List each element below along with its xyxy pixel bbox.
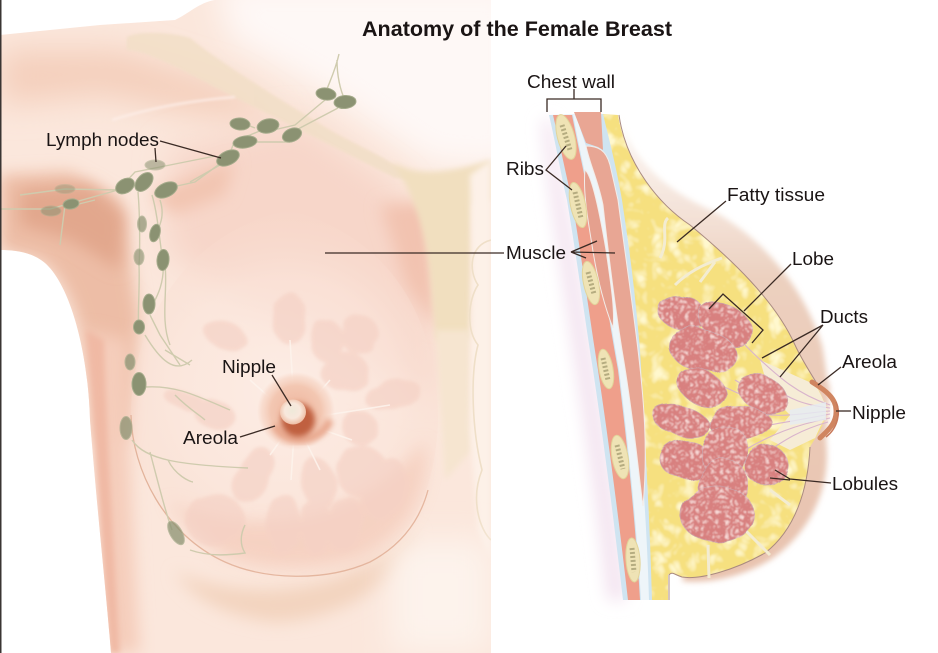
skin line [619,115,816,600]
label: ribs [506,146,572,190]
label: fatty tissue: Fatty tissue [727,184,825,205]
back shadow [542,120,626,600]
label: areola, section view [818,351,898,385]
label: nipple, front view: Nipple [222,356,276,377]
fatty tissue [603,114,826,600]
label: muscle [325,241,615,263]
label: nipple, front view [222,356,291,406]
label: muscle: Muscle [506,242,566,263]
main muscle [574,112,603,150]
white lining [573,115,649,600]
pectoralis major [586,146,645,506]
breast lower outline [131,415,428,576]
nipple [280,400,306,424]
label: ducts [762,306,868,377]
label: areola, front view [183,426,275,448]
lobes behind skin [161,292,424,557]
label: lobe: Lobe [792,248,834,269]
left border strip [0,0,2,653]
title: Anatomy of the Female Breast [362,18,672,41]
label: ribs: Ribs [506,158,544,179]
label: lobules: Lobules [832,473,898,494]
lobes and lobules [649,290,794,542]
breast form [234,261,407,376]
skin band [619,115,830,582]
pectoralis minor [584,170,614,328]
duct sinus highlights [790,402,826,425]
areola [257,372,335,450]
label: chest wall: Chest wall [527,71,615,92]
label: chest wall [527,71,615,112]
sternum band [392,160,491,340]
panel: cross-section of the breast [542,112,838,600]
label: lobules [770,470,898,494]
intercostal muscle [553,115,640,600]
label: ducts: Ducts [820,306,868,327]
panel: front view of the breast [0,0,520,653]
connective strands [660,218,790,578]
torso skin [0,0,520,653]
label: lobe [709,248,834,343]
label: fatty tissue [677,184,825,242]
label: areola, section view: Areola [842,351,898,372]
pale sinus area near the nipple [760,360,828,450]
rib marrow [562,125,634,572]
shadow under breast [182,544,404,626]
ribs [552,113,642,582]
label: nipple, section view: Nipple [852,402,906,423]
ducts radiating [250,340,390,480]
milk ducts [720,345,830,450]
label: lymph nodes: Lymph nodes [46,129,159,150]
areola and nipple skin [812,382,836,438]
chest wall membrane [549,114,652,600]
breast lower shading [165,440,426,568]
label: lymph nodes [46,129,221,162]
section outline join at nipple [826,402,838,437]
lymph vessels [0,54,345,555]
label: areola, front view: Areola [183,427,239,448]
lymph nodes [41,87,357,547]
